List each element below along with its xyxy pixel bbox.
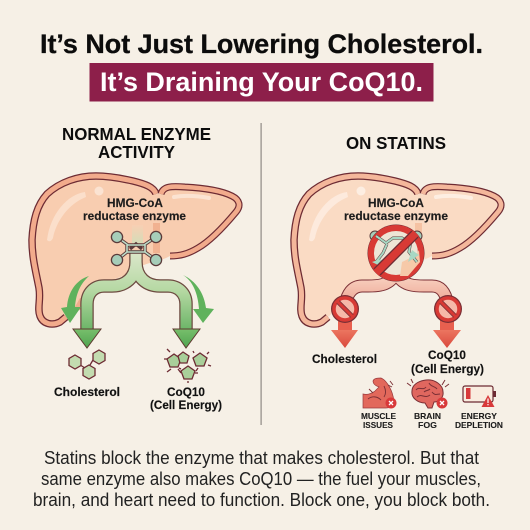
label: CoQ10 cell energy: CoQ10 — [167, 387, 205, 399]
heading: normal enzyme activity: NORMAL ENZYME — [62, 124, 211, 144]
label: brain fog: FOG — [418, 420, 437, 430]
liver illustration — [32, 176, 239, 324]
curved side arrow right — [183, 275, 214, 323]
title: It’s Not Just Lowering Cholesterol. — [40, 29, 483, 59]
highlighted subtitle: It’s Draining Your CoQ10. — [100, 67, 423, 97]
label: muscle issues: MUSCLE — [361, 411, 396, 421]
label: brain fog — [414, 411, 441, 430]
blocked arrow to cholesterol — [331, 295, 359, 348]
heading: normal enzyme activity: ACTIVITY — [98, 142, 175, 162]
panel: on statins — [294, 133, 503, 430]
icon: brain fog — [407, 379, 449, 408]
enzyme label: reductase enzyme — [83, 211, 186, 223]
label: CoQ10 cell energy — [411, 350, 484, 376]
enzyme label — [83, 198, 186, 223]
blocked enzyme icon — [368, 224, 424, 282]
enzyme label: HMG-CoA — [107, 198, 163, 210]
liver illustration — [294, 176, 501, 324]
label: CoQ10 cell energy: (Cell Energy) — [411, 364, 484, 376]
explanatory text: brain, and heart need to function. Block one, you block both. — [33, 489, 490, 510]
blocked pathways — [345, 276, 448, 305]
explanatory text: same enzyme also makes CoQ10 — the fuel your muscles, — [41, 468, 481, 489]
label: CoQ10 cell energy: CoQ10 — [428, 350, 466, 362]
explanatory text: Statins block the enzyme that makes cholesterol. But that — [44, 447, 480, 468]
heading: normal enzyme activity — [62, 124, 211, 162]
green branching arrows — [73, 250, 200, 348]
icon: muscle issues — [363, 378, 396, 408]
heading: on statins: ON STATINS — [346, 133, 446, 153]
label: cholesterol: Cholesterol — [312, 354, 377, 366]
label: CoQ10 cell energy: (Cell Energy) — [150, 400, 222, 412]
panel: normal enzyme activity — [32, 124, 239, 412]
label: muscle issues — [361, 411, 396, 430]
explanatory text — [33, 447, 490, 510]
label: energy depletion: ENERGY — [461, 411, 497, 421]
label: brain fog: BRAIN — [414, 411, 441, 421]
label: CoQ10 cell energy — [150, 387, 222, 412]
icon: energy depletion — [463, 386, 496, 407]
cholesterol molecule — [69, 350, 105, 379]
blocked arrow to CoQ10 — [433, 295, 462, 348]
label: cholesterol: Cholesterol — [54, 387, 120, 399]
CoQ10 molecules — [164, 349, 211, 383]
label: energy depletion: DEPLETION — [455, 420, 503, 430]
enzyme label: reductase enzyme — [344, 211, 448, 223]
enzyme icon — [111, 231, 162, 266]
enzyme label: HMG-CoA — [368, 198, 424, 210]
enzyme label — [344, 198, 448, 223]
curved side arrow left — [61, 276, 89, 323]
label: muscle issues: ISSUES — [363, 420, 393, 430]
label: energy depletion — [455, 411, 503, 430]
